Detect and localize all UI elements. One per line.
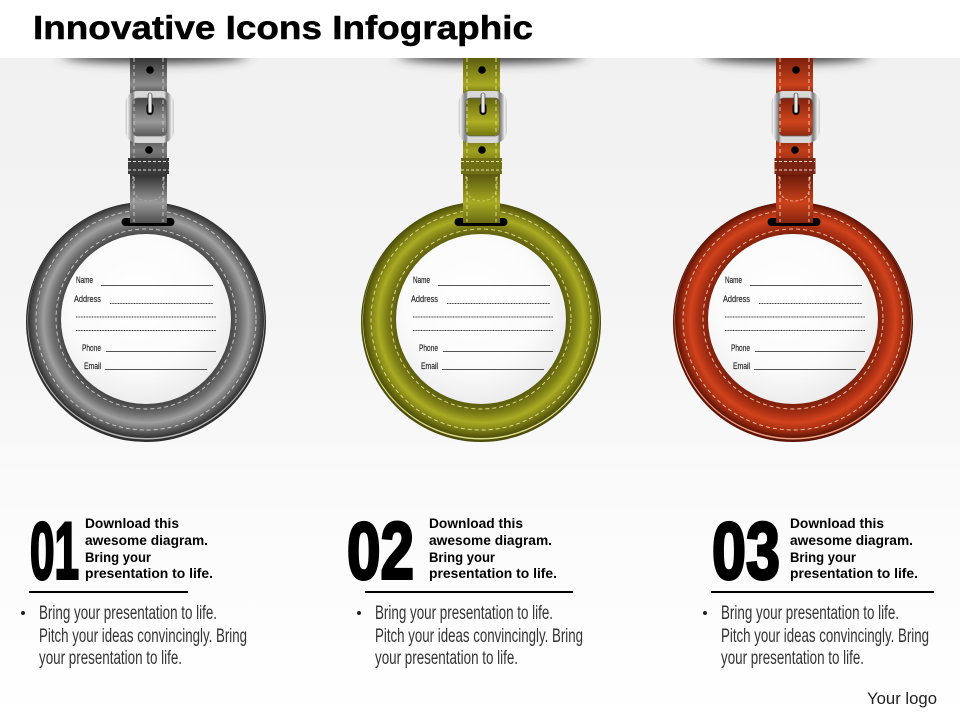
heading 02: Bring your <box>429 549 496 565</box>
belt and buckle: grey <box>122 58 174 226</box>
divider 03 <box>711 591 934 593</box>
address form: olive: Email <box>421 361 438 371</box>
address form: olive: Phone <box>419 343 438 353</box>
address form: grey: Address <box>74 294 101 304</box>
ring: olive <box>361 202 601 442</box>
ring: grey <box>26 202 266 442</box>
section 01 <box>21 506 247 669</box>
heading 02: presentation to life. <box>429 565 557 581</box>
belt and buckle: red <box>768 58 820 226</box>
divider 01 <box>29 591 188 593</box>
heading 03 <box>790 515 918 581</box>
bullet text 03: your presentation to life. <box>721 648 864 669</box>
heading 03: Bring your <box>790 549 857 565</box>
heading 02: awesome diagram. <box>429 532 552 548</box>
section 03 <box>703 506 934 669</box>
heading 03: Download this <box>790 515 884 531</box>
address form: red: Email <box>733 361 750 371</box>
section 02 <box>347 506 583 669</box>
address form: grey <box>74 275 216 371</box>
number 03: 03 <box>712 506 780 596</box>
header band <box>0 0 960 58</box>
bullet text 02 <box>357 603 583 669</box>
number 01: 01 <box>30 506 79 596</box>
address form: grey: Name <box>76 275 93 285</box>
ring: red <box>673 202 913 442</box>
bullet text 01: Pitch your ideas convincingly. Bring <box>39 626 247 647</box>
heading 01 <box>85 515 213 581</box>
heading 01: awesome diagram. <box>85 532 208 548</box>
luggage tag: red <box>673 58 913 442</box>
bullet text 02: Pitch your ideas convincingly. Bring <box>375 626 583 647</box>
address form: red: Name <box>725 275 742 285</box>
heading 01: presentation to life. <box>85 565 213 581</box>
bullet text 03 <box>703 603 929 669</box>
address form: olive <box>411 275 553 371</box>
heading 02 <box>429 515 557 581</box>
logo text: Your logo <box>867 690 937 708</box>
address form: red: Phone <box>731 343 750 353</box>
address form: grey: Phone <box>82 343 101 353</box>
address form: olive: Name <box>413 275 430 285</box>
address form: grey: Email <box>84 361 101 371</box>
belt and buckle: olive <box>454 58 508 226</box>
hanging shadows <box>63 49 868 63</box>
address form: olive: Address <box>411 294 438 304</box>
luggage tag: olive <box>361 58 601 442</box>
number 02: 02 <box>347 506 414 596</box>
bullet text 02: Bring your presentation to life. <box>375 603 553 624</box>
bullet text 01: your presentation to life. <box>39 648 182 669</box>
heading 01: Download this <box>85 515 179 531</box>
heading 03: awesome diagram. <box>790 532 913 548</box>
luggage tag: grey <box>26 58 266 442</box>
bullet text 01 <box>21 603 247 669</box>
heading 03: presentation to life. <box>790 565 918 581</box>
address form: red <box>723 275 865 371</box>
heading 02: Download this <box>429 515 523 531</box>
bullet text 02: your presentation to life. <box>375 648 518 669</box>
title: Innovative Icons Infographic <box>33 9 533 46</box>
bullet text 01: Bring your presentation to life. <box>39 603 217 624</box>
divider 02 <box>365 591 573 593</box>
address form: red: Address <box>723 294 750 304</box>
heading 01: Bring your <box>85 549 152 565</box>
